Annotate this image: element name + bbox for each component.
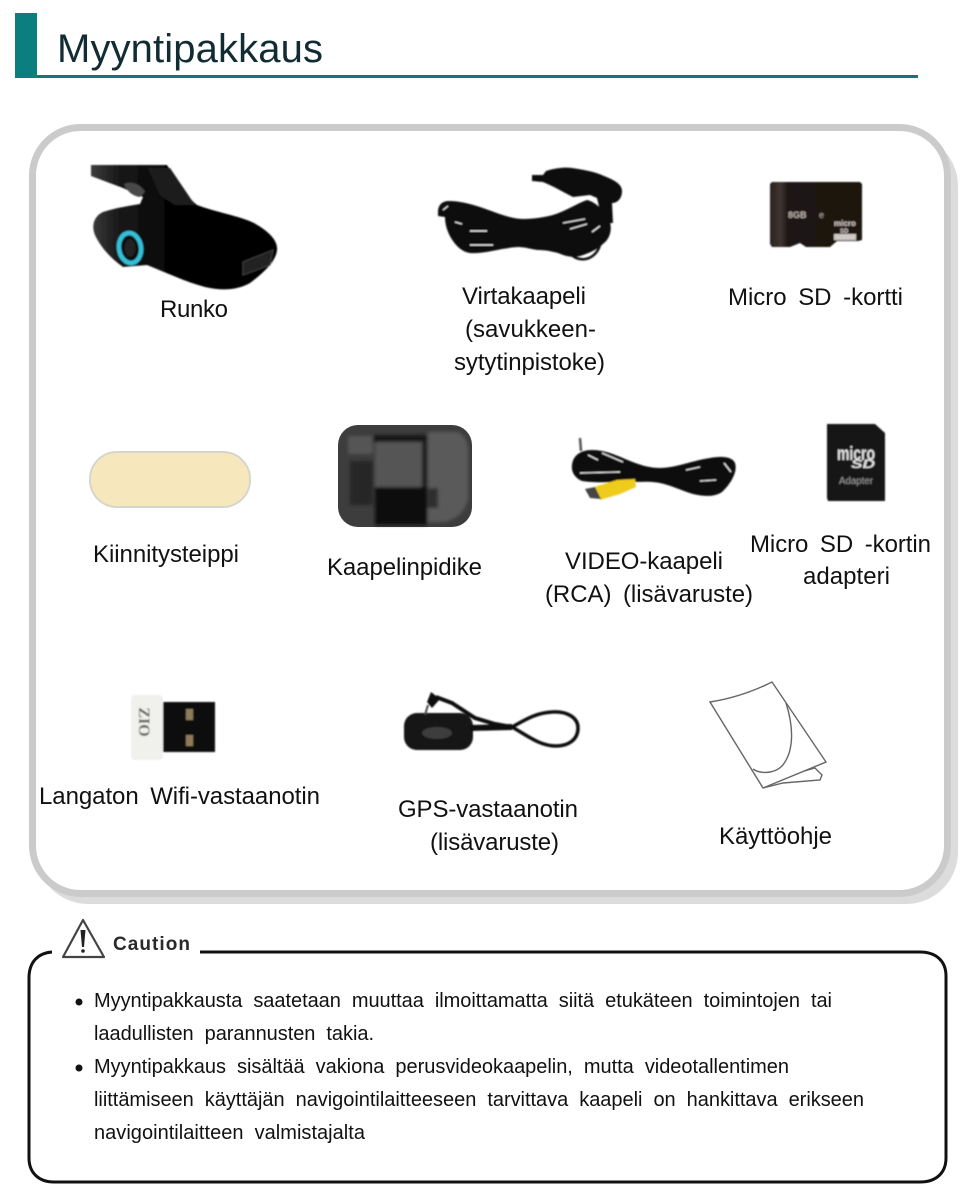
icon: user manual <box>710 682 826 788</box>
label: Virtakaapeli: (savukkeen- <box>465 316 596 343</box>
label: Virtakaapeli: sytytinpistoke) <box>454 349 605 376</box>
header: title bar <box>15 13 918 78</box>
icon: micro SD card: e <box>819 210 824 220</box>
caution label: Caution <box>113 934 190 955</box>
label: VIDEO-kaapeli <box>545 548 753 608</box>
title: Myyntipakkaus <box>57 27 323 71</box>
label: VIDEO-kaapeli: (RCA) (lisävaruste) <box>545 581 753 608</box>
bullet text 2: liittämiseen käyttäjän navigointilaitteeseen tarvittava kaapeli on hankittava erikseen <box>94 1089 864 1111</box>
bullet text 1: Myyntipakkausta saatetaan muuttaa ilmoittamatta siitä etukäteen toimintojen tai <box>94 990 832 1012</box>
label: Kiinnitysteippi: Kiinnitysteippi <box>93 541 239 568</box>
label: Wifi receiver: Langaton Wifi-vastaanotin <box>39 783 320 810</box>
label: GPS-vastaanotin: GPS-vastaanotin <box>398 796 578 823</box>
bullet text 1: laadullisten parannusten takia. <box>94 1023 374 1045</box>
icon: mounting tape <box>90 452 250 507</box>
label: Micro SD -kortti: Micro SD -kortti <box>728 284 903 311</box>
icon: Wifi receiver <box>131 695 215 760</box>
label: Micro SD -kortin adapteri: adapteri <box>803 563 890 590</box>
icon: micro SD card: micro <box>834 219 856 228</box>
panel: caution box <box>29 920 946 1182</box>
icon: micro SD card: 8GB <box>788 210 807 220</box>
icon: power cable <box>438 168 622 259</box>
bullet text 2: navigointilaitteen valmistajalta <box>94 1122 366 1144</box>
icon: cable holder <box>338 425 472 527</box>
label: GPS-vastaanotin: (lisävaruste) <box>430 829 559 856</box>
icon: micro SD adapter: Adapter <box>839 476 874 487</box>
label: Runko: Runko <box>160 296 228 323</box>
icon: micro SD adapter: micro <box>837 444 875 465</box>
bullet text 2 <box>76 1056 864 1144</box>
icon: micro SD adapter: SD <box>851 457 875 471</box>
icon: warning triangle <box>63 920 104 957</box>
label: Micro SD -kortin adapteri: Micro SD -kortin <box>750 531 931 558</box>
label: VIDEO-kaapeli: VIDEO-kaapeli <box>565 548 723 575</box>
bullet text 1 <box>76 990 832 1045</box>
icon: camera body <box>91 165 277 289</box>
label: Kaapelinpidike: Kaapelinpidike <box>327 554 482 581</box>
label: Virtakaapeli: Virtakaapeli <box>462 283 586 310</box>
icon: Wifi receiver: ZIO <box>135 707 152 737</box>
icon: micro SD card <box>770 182 862 247</box>
icon: RCA video cable <box>572 438 736 500</box>
icon: micro SD card: SD <box>840 229 849 235</box>
label: Käyttöohje: Käyttöohje <box>719 823 832 850</box>
label: Micro SD -kortin adapteri <box>750 531 931 590</box>
bullet text 2: Myyntipakkaus sisältää vakiona perusvideokaapelin, mutta videotallentimen <box>94 1056 789 1078</box>
panel: package contents <box>32 128 958 904</box>
icon: GPS receiver <box>404 692 578 750</box>
label: Virtakaapeli <box>454 283 605 376</box>
icon: micro SD adapter <box>827 424 885 501</box>
label: GPS-vastaanotin <box>398 796 578 856</box>
